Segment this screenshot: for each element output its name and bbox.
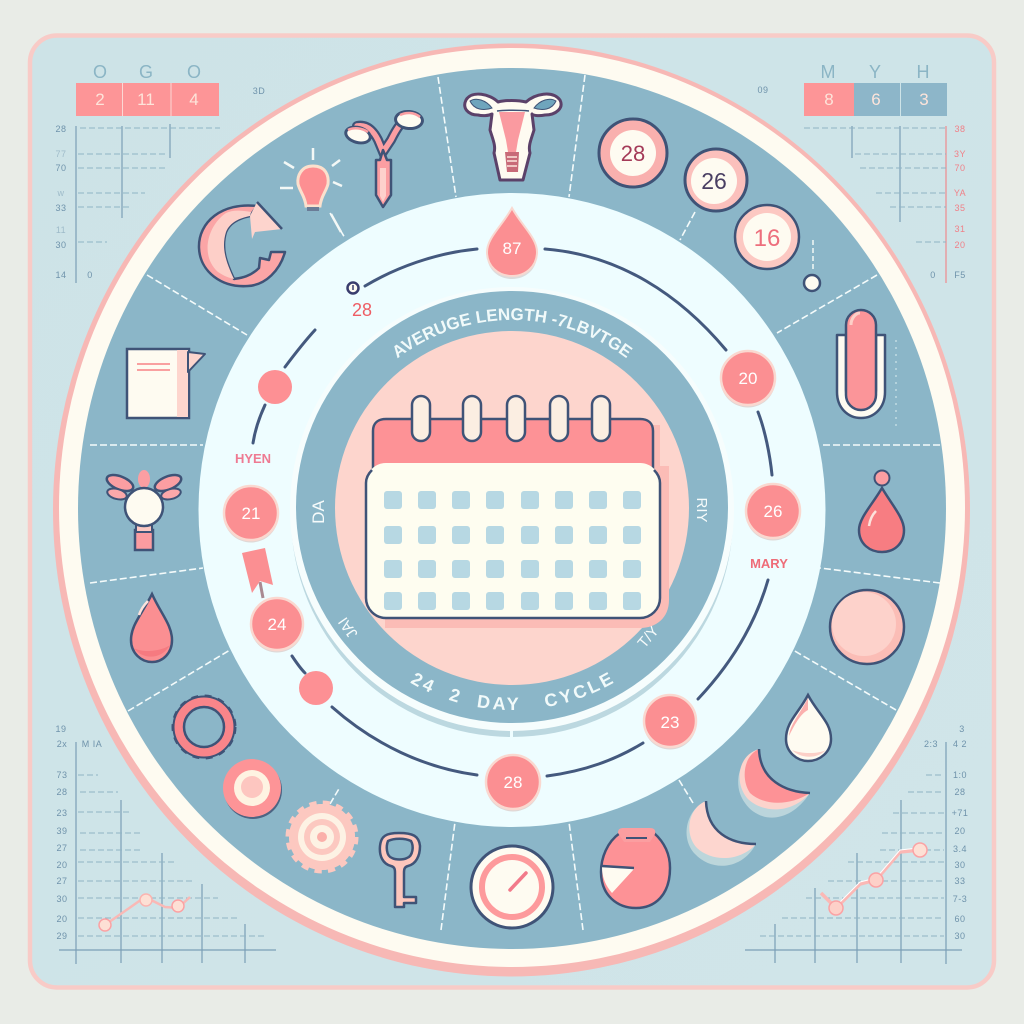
central pink circle <box>335 331 689 685</box>
chart: bottom right: 7-3 <box>953 894 967 904</box>
chart: top right: 31 <box>954 224 966 234</box>
chart: top right: 20 <box>954 240 966 250</box>
number badge: 28: 28 <box>621 141 645 166</box>
table: top left <box>76 62 219 116</box>
icon: flower bulb <box>105 470 183 550</box>
number badge: 26: 26 <box>701 168 727 194</box>
chart: bottom right: 20 <box>954 826 966 836</box>
inner blue ring <box>292 291 732 737</box>
chart: bottom right: 1:0 <box>953 770 967 780</box>
chart: bottom right: 30 <box>954 931 966 941</box>
calendar header <box>373 419 653 470</box>
day marker: 20: 20 <box>739 369 757 388</box>
binder rings <box>412 396 610 441</box>
table: top right: Y <box>869 62 881 82</box>
label: HYEN: HYEN <box>235 451 271 466</box>
chart: top left: 33 <box>55 203 67 213</box>
drop marker: 87: 87 <box>503 239 521 258</box>
icon: key <box>380 833 420 907</box>
table: top left: O <box>93 62 107 82</box>
icon: circular arrow <box>199 202 285 286</box>
flag marker <box>242 548 273 598</box>
day marker: 26 <box>746 484 800 540</box>
chart: top right <box>757 62 966 283</box>
small clock icon <box>348 282 358 294</box>
icon: fallopian tube <box>342 109 425 207</box>
table: top right <box>804 62 947 116</box>
chart: top left <box>55 62 265 283</box>
chart: top right: F5 <box>954 270 966 280</box>
chart: top left: 3D <box>253 86 265 96</box>
marker dot lower left <box>299 671 333 705</box>
chart: bottom left: 23 <box>56 808 68 818</box>
chart: bottom left: 39 <box>56 826 68 836</box>
chart: top right: 09 <box>757 85 769 95</box>
chart: bottom left: 20 <box>56 914 68 924</box>
icon: large crescent <box>738 749 810 818</box>
day marker: 23: 23 <box>661 713 679 732</box>
day marker: 24 <box>250 598 304 652</box>
drop marker: 87 <box>487 208 537 279</box>
icon: note page <box>127 349 205 418</box>
chart: bottom left: 19 <box>55 724 67 734</box>
calendar body <box>366 463 660 618</box>
chart: bottom left: M IA <box>82 739 102 749</box>
chart: top left: w <box>56 188 64 198</box>
icon: tampon <box>837 310 896 430</box>
curved title: AVERUGE LENGTH -7LBVTGE <box>394 308 633 358</box>
chart: top right: 3Y <box>954 149 966 159</box>
day marker: 21: 21 <box>242 504 260 523</box>
calendar shadow <box>385 425 669 628</box>
day marker: 20 <box>720 351 776 408</box>
chart: bottom right: 4 2 <box>953 739 967 749</box>
side label lower left: JAI <box>335 614 361 641</box>
chart: top right: 35 <box>954 203 966 213</box>
chart: top left: 30 <box>55 240 67 250</box>
side label lower right: T/Y <box>635 623 663 652</box>
table: top right: 3 <box>919 90 929 109</box>
number badge: 28 <box>599 119 667 187</box>
calendar <box>366 396 669 628</box>
icon: drop with ball <box>859 470 904 552</box>
table: top left: 11 <box>137 90 155 109</box>
chart: bottom left: 29 <box>56 931 68 941</box>
chart: bottom right: 3 <box>959 724 965 734</box>
chart: bottom left: 28 <box>56 787 68 797</box>
number badge: 26 <box>685 149 747 211</box>
icon: egg shape <box>601 828 670 908</box>
table: top right: 6 <box>871 90 881 109</box>
table: top right: H <box>916 62 930 82</box>
chart: bottom right: 28 <box>954 787 966 797</box>
table: top left: G <box>139 62 153 82</box>
side label left: DA <box>309 500 328 524</box>
chart: top left: 28 <box>55 124 67 134</box>
chart: bottom left: 2x <box>57 739 67 749</box>
chart: bottom right: +71 <box>952 808 968 818</box>
chart: top left: 0 <box>87 270 93 280</box>
chart: bottom left: 27 <box>56 876 68 886</box>
chart: top right: 38 <box>954 124 966 134</box>
day marker: 28 bottom: 28 <box>504 773 522 792</box>
label: MARY: MARY <box>750 556 788 571</box>
chart: top left: 11 <box>56 225 66 235</box>
chart: bottom left: 73 <box>56 770 68 780</box>
icon: uterus <box>465 94 561 180</box>
icon: light bulb <box>280 148 342 232</box>
chart: bottom right: 33 <box>954 876 966 886</box>
table: top right: M <box>820 62 836 82</box>
day marker: 24: 24 <box>268 615 286 634</box>
curved caption: 24 2 DAY CYCLE <box>410 672 614 710</box>
line series <box>99 894 190 931</box>
icon: cream drop <box>786 695 831 761</box>
chart: top right: YA <box>954 188 966 198</box>
chart: bottom right: 3.4 <box>953 844 967 854</box>
line series <box>821 843 927 915</box>
chart: bottom right <box>745 724 968 964</box>
icon: target circle <box>223 759 282 819</box>
day marker: 21 <box>224 486 278 542</box>
chart: bottom left: 27 <box>56 843 68 853</box>
table: top left: O <box>187 62 201 82</box>
day marker: 26: 26 <box>764 502 782 521</box>
icon: ring gear <box>177 700 231 754</box>
table: top left: 4 <box>189 90 199 109</box>
chart: bottom left: 20 <box>56 860 68 870</box>
day grid <box>384 491 641 610</box>
side label right: RIY <box>693 497 710 523</box>
chart: bottom right: 2:3 <box>924 739 938 749</box>
table: top left: 2 <box>95 90 105 109</box>
number badge: 16 <box>735 205 799 269</box>
chart: top left: 14 <box>55 270 67 280</box>
icon: left drop <box>131 594 172 662</box>
chart: bottom right: 60 <box>954 914 966 924</box>
chart: top left: 77 <box>55 149 67 159</box>
chart: bottom left: 30 <box>56 894 68 904</box>
label: 28: 28 <box>352 300 372 320</box>
icon: pink circle <box>830 590 904 664</box>
chart: top right: 70 <box>954 163 966 173</box>
timeline ring arcs <box>253 249 772 776</box>
chart: top right: 0 <box>930 270 936 280</box>
day marker: 23 <box>644 695 696 750</box>
icon: small crescent <box>687 801 756 866</box>
marker dot <box>804 240 820 291</box>
day marker: 28 bottom <box>486 755 540 812</box>
chart: bottom right: 30 <box>954 860 966 870</box>
chart: bottom left <box>55 724 276 964</box>
marker dot upper left <box>258 370 292 404</box>
icon: gauge <box>471 846 553 928</box>
icon: scalloped target <box>289 804 355 870</box>
chart: top left: 70 <box>55 163 67 173</box>
table: top right: 8 <box>824 90 834 109</box>
number badge: 16: 16 <box>754 225 780 252</box>
